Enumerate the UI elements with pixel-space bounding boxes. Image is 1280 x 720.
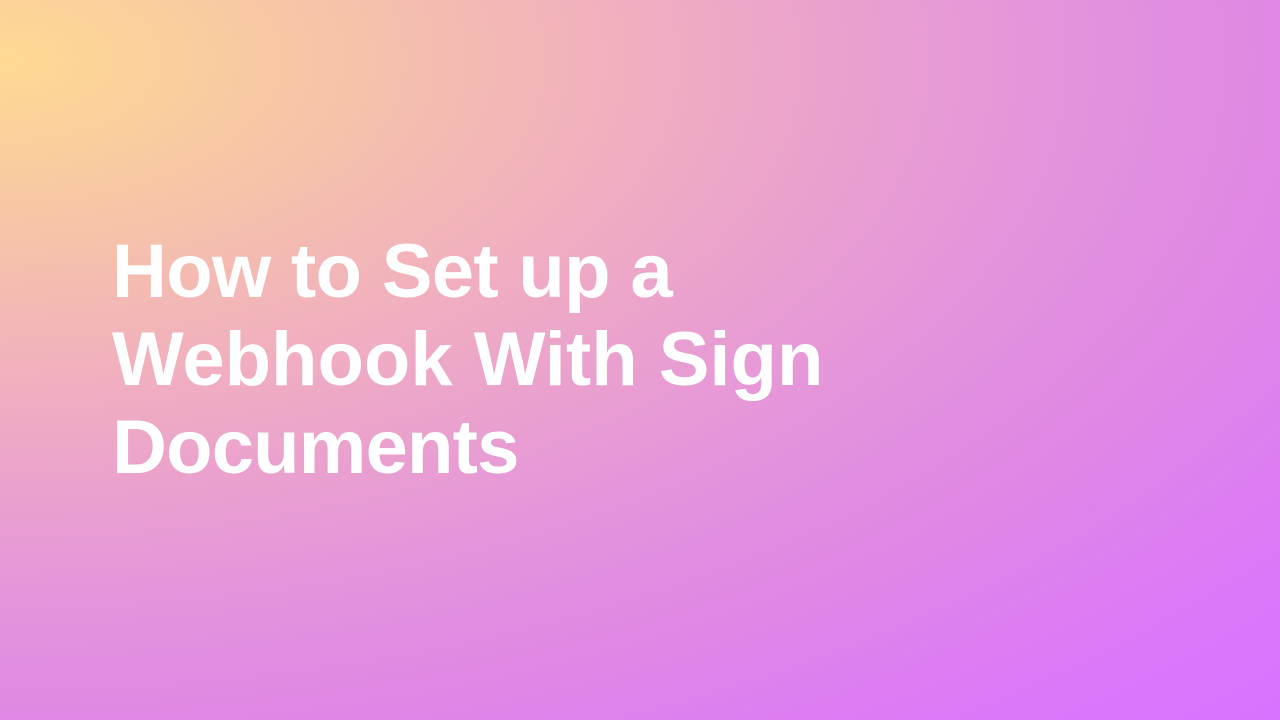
title: Webhook With Sign (112, 317, 823, 402)
title: How to Set up a (112, 229, 672, 314)
title: Documents (112, 405, 519, 490)
title (112, 229, 823, 490)
